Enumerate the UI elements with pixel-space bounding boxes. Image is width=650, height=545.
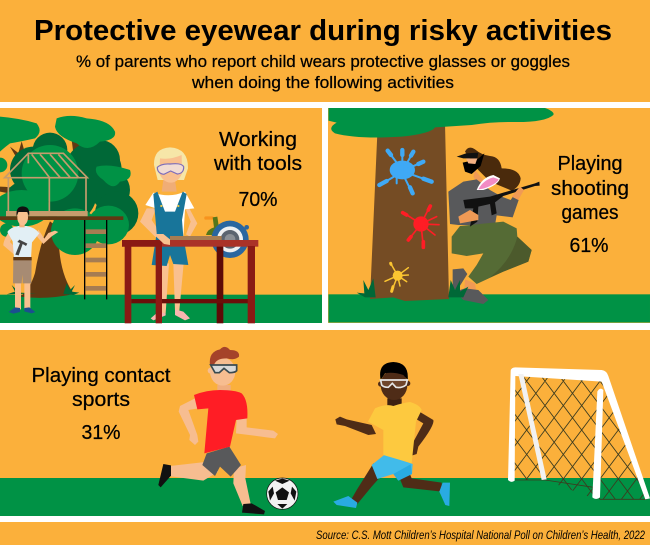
tree trunk	[20, 221, 74, 298]
label: working with tools: with tools	[213, 153, 302, 175]
trousers	[452, 222, 532, 284]
label: playing shooting games: shooting	[551, 178, 629, 200]
subtitle: when doing the following activities	[191, 74, 454, 92]
goal frame	[508, 367, 650, 499]
neck	[473, 170, 483, 185]
hair	[465, 148, 521, 191]
illustration: paintball player	[448, 148, 540, 304]
ladder	[85, 220, 107, 299]
title: Protective eyewear during risky activities	[34, 15, 612, 47]
subtitle	[76, 53, 570, 92]
ankle	[464, 279, 476, 289]
soccer ball	[267, 478, 298, 509]
label: playing contact sports: Playing contact	[32, 365, 171, 387]
hands	[458, 187, 524, 223]
circular saw	[170, 216, 249, 258]
illustration: woman at workbench	[122, 147, 258, 323]
label: playing contact sports	[32, 365, 171, 444]
panel: playing contact sports	[0, 330, 650, 516]
face and mask	[463, 153, 484, 174]
grass tuft	[7, 283, 79, 295]
label: playing shooting games: games	[562, 202, 618, 224]
panel: playing shooting games	[328, 108, 650, 323]
front shoe	[458, 288, 488, 304]
illustration: tree with paint splats	[328, 108, 650, 323]
workbench	[122, 240, 258, 323]
panel: working with tools	[0, 108, 322, 323]
source bar	[0, 522, 650, 545]
torso and arm	[448, 179, 519, 225]
label: playing contact sports: sports	[72, 389, 130, 411]
tree canopy	[5, 133, 138, 235]
label: playing shooting games	[551, 153, 629, 257]
header band	[0, 0, 650, 102]
label: playing shooting games: Playing	[558, 153, 622, 175]
red paint splat	[403, 206, 439, 247]
illustration: tree house	[0, 116, 322, 323]
soccer goal	[508, 367, 650, 500]
back shoe	[453, 268, 467, 291]
subtitle: % of parents who report child wears protective glasses or goggles	[76, 53, 570, 71]
woman's hand	[153, 234, 170, 245]
label: working with tools: Working	[219, 129, 297, 151]
player in red shirt	[158, 347, 278, 514]
paintball marker	[463, 182, 540, 227]
woman with goggles	[140, 147, 197, 320]
yellow paint splat	[385, 263, 408, 291]
tree canopy	[328, 108, 554, 137]
illustration: soccer players	[158, 347, 450, 514]
goal net	[514, 376, 644, 500]
blue paint splat	[379, 150, 432, 193]
value 31%: 31%	[82, 422, 121, 444]
value 70%: 70%	[238, 189, 278, 211]
tree house frame	[5, 153, 87, 212]
grass tuft	[357, 278, 376, 297]
value 61%: 61%	[570, 235, 609, 257]
label: working with tools	[213, 129, 302, 211]
man with hammer	[3, 206, 58, 314]
tree trunk	[370, 123, 449, 301]
grass tuft	[448, 280, 468, 297]
player in yellow shirt	[333, 362, 450, 508]
